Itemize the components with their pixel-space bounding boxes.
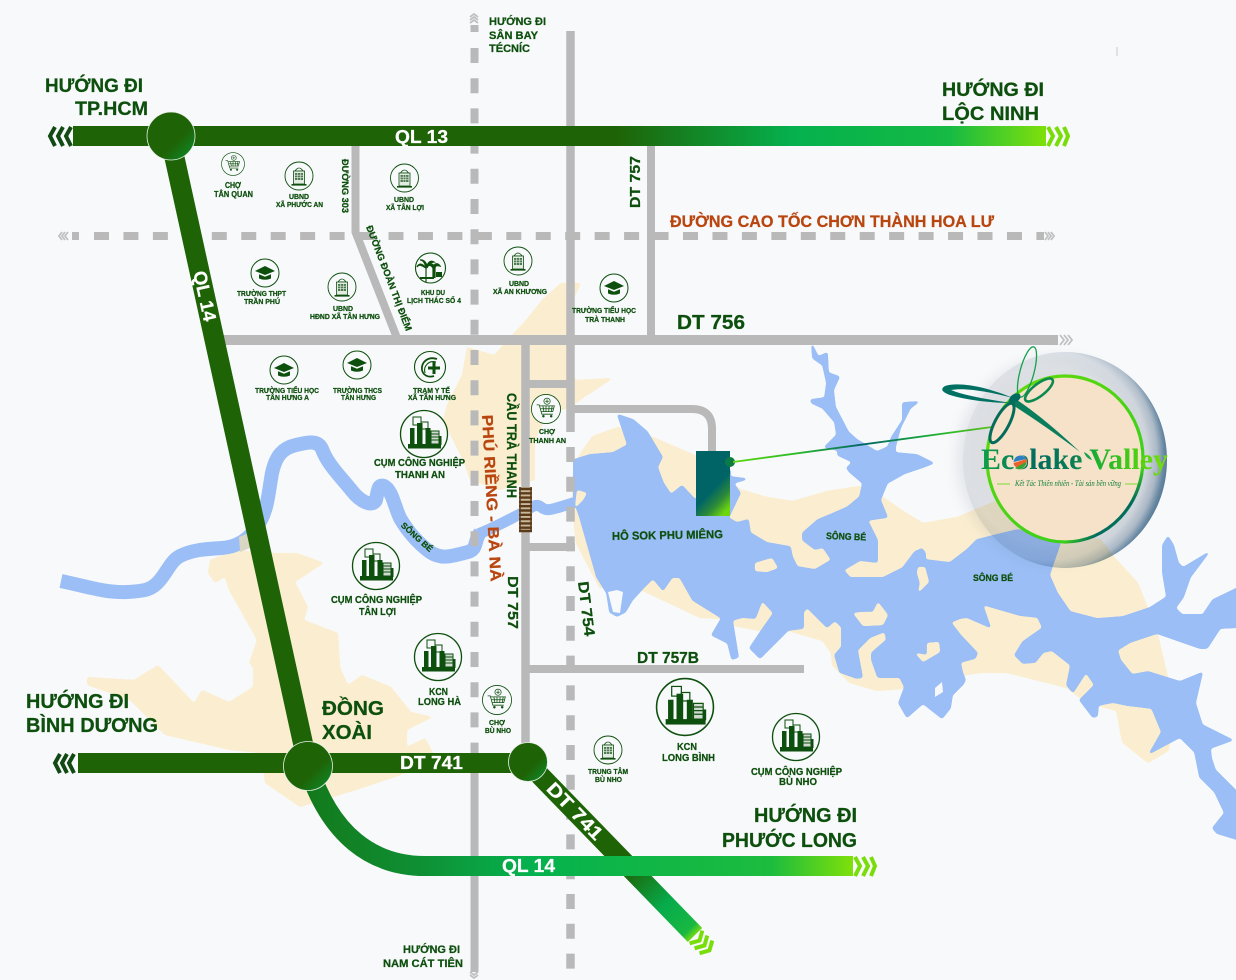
- direction Bình Dương: HƯỚNG ĐI: [26, 689, 129, 713]
- point of interest: UBND Xã Tân Lợi: XÃ TÂN LỢI: [386, 203, 424, 212]
- point of interest: Chợ Thanh An: CHỢ: [539, 427, 556, 436]
- label Phú Riềng - Bà Nà: PHÚ RIỀNG - BÀ NÀ: [478, 414, 505, 582]
- junction: DT741 east: [508, 742, 548, 782]
- point of interest: UBND Xã Phước An: XÃ PHƯỚC AN: [276, 200, 323, 209]
- point of interest: KCN Long Hà: LONG HÀ: [418, 695, 461, 708]
- point of interest: KCN Long Hà: KCN: [429, 687, 448, 698]
- direction Lộc Ninh: HƯỚNG ĐI: [942, 77, 1044, 101]
- label Sông Bé river: SÔNG BÉ: [399, 519, 436, 554]
- dragonfly emblem: [942, 345, 1080, 452]
- label QL 13: QL 13: [395, 126, 448, 147]
- point of interest: Chợ Tân Quan: TÂN QUAN: [214, 190, 253, 199]
- point of interest: Chợ Bù Nho: [482, 685, 512, 735]
- point of interest: KCN Long Bình: [657, 679, 715, 764]
- point of interest: Trạm Y tế Xã Tân Hưng: [408, 352, 456, 402]
- label expressway: ĐƯỜNG CAO TỐC CHƠN THÀNH HOA LƯ: [670, 211, 994, 231]
- label QL 14 vertical: QL 14: [189, 269, 221, 324]
- label Hô Sok Phu Miêng: HÔ SOK PHU MIÊNG: [612, 528, 723, 543]
- direction Nam Cát Tiên: [383, 943, 463, 970]
- point of interest: Chợ Thanh An: THANH AN: [529, 436, 566, 445]
- point of interest: Trạm Y tế Xã Tân Hưng: TRẠM Y TẾ: [413, 385, 450, 395]
- direction TP.HCM: TP.HCM: [75, 98, 148, 120]
- direction sân bay Técníc: HƯỚNG ĐI: [489, 15, 546, 28]
- point of interest: Chợ Bù Nho: BÙ NHO: [485, 726, 511, 735]
- label QL 14 bottom: QL 14: [502, 855, 556, 876]
- point of interest: Trường THCS Tân Hưng: TRƯỜNG THCS: [333, 386, 382, 395]
- point of interest: UBND Xã An Khương: [493, 247, 547, 296]
- point of interest: UBND Xã An Khương: UBND: [509, 279, 530, 288]
- point of interest: Chợ Tân Quan: [214, 153, 253, 199]
- point of interest: UBND Xã Tân Lợi: UBND: [394, 195, 415, 204]
- lake holes and river sand: [239, 533, 943, 697]
- label DT 757 top: DT 757: [627, 156, 644, 208]
- point of interest: Trường THPT Trần Phú: TRƯỜNG THPT: [237, 289, 286, 298]
- direction Bình Dương: [26, 689, 158, 737]
- direction TP.HCM: [45, 73, 148, 120]
- junction: QL13 and QL14: [147, 112, 195, 160]
- leader line to logo: [733, 427, 992, 462]
- point of interest: Chợ Tân Quan: CHỢ: [225, 181, 241, 190]
- direction Phước Long: PHƯỚC LONG: [722, 828, 857, 852]
- land sand areas: [87, 283, 1169, 807]
- lake islands: [575, 490, 940, 662]
- point of interest: Trường THCS Tân Hưng: TÂN HƯNG: [341, 393, 376, 402]
- point of interest: Cụm công nghiệp Tân Lợi: CỤM CÔNG NGHIỆP: [331, 593, 422, 606]
- point of interest: UBND Xã Phước An: [276, 162, 323, 209]
- Ecolake Valley logo badge: [942, 345, 1168, 568]
- point of interest: Trạm Y tế Xã Tân Hưng: XÃ TÂN HƯNG: [408, 393, 456, 402]
- point of interest: Cụm công nghiệp Tân Lợi: TÂN LỢI: [359, 605, 396, 618]
- point of interest: UBND HĐND Xã Tân Hưng: UBND: [333, 304, 354, 313]
- label DT 754: DT 754: [574, 580, 598, 638]
- direction Lộc Ninh: [942, 77, 1044, 125]
- point of interest: Cụm công nghiệp Bù Nho: BÙ NHO: [779, 775, 817, 788]
- direction sân bay Técníc: SÂN BAY: [489, 29, 539, 42]
- lake Sok Phu Miêng and Sông Bé reservoir: [574, 345, 1236, 840]
- logo tagline: Kết Tác Thiên nhiên - Tài sản bền vững: [1014, 479, 1121, 488]
- point of interest: Cụm công nghiệp Tân Lợi: [331, 542, 422, 618]
- point of interest: UBND Xã Phước An: UBND: [289, 192, 310, 201]
- point of interest: Cụm công nghiệp Bù Nho: [751, 714, 842, 788]
- label Sông Bé north: SÔNG BÉ: [826, 530, 866, 543]
- Đồng Xoài: ĐỒNG: [322, 696, 384, 720]
- point of interest: Trường Tiểu học Trà Thanh: TRÀ THANH: [585, 315, 625, 324]
- point of interest: Cụm công nghiệp Bù Nho: CỤM CÔNG NGHIỆP: [751, 765, 842, 778]
- point of interest: Khu du lịch Thác Số 4: KHU DU: [421, 288, 445, 297]
- junction: DT741 and QL14: [284, 742, 332, 790]
- direction Bình Dương: BÌNH DƯƠNG: [26, 714, 158, 737]
- point of interest: Chợ Bù Nho: CHỢ: [489, 718, 506, 727]
- road DT 741 diagonal: [528, 763, 716, 957]
- point of interest: Trường Tiểu học Tân Hưng A: TRƯỜNG TIỂU HỌC: [255, 386, 320, 395]
- road DT 741 horizontal: [55, 753, 528, 773]
- point of interest: Trường Tiểu học Tân Hưng A: TÂN HƯNG A: [266, 393, 310, 402]
- Đồng Xoài: [322, 696, 384, 744]
- label DT 741 horizontal: DT 741: [400, 752, 463, 773]
- direction sân bay Técníc: TÉCNÍC: [489, 42, 530, 55]
- point of interest: Trường Tiểu học Tân Hưng A: [255, 356, 320, 402]
- point of interest: Cụm công nghiệp Thanh An: CỤM CÔNG NGHIỆP: [374, 456, 465, 469]
- point of interest: KCN Long Bình: KCN: [677, 742, 697, 753]
- point of interest: Cụm công nghiệp Thanh An: [374, 410, 465, 481]
- tiny mark top right: [1116, 47, 1118, 56]
- road QL 13: [50, 126, 1068, 146]
- point of interest: Trường Tiểu học Trà Thanh: TRƯỜNG TIỂU HỌC: [572, 306, 637, 315]
- label đường Đoàn Thị Điểm: ĐƯỜNG ĐOÀN THỊ ĐIỂM: [363, 224, 415, 333]
- point of interest: UBND Xã Tân Lợi: [386, 164, 424, 212]
- direction Lộc Ninh: LỘC NINH: [942, 101, 1039, 125]
- label đường 303: ĐƯỜNG 303: [339, 159, 351, 213]
- label DT 757B: DT 757B: [637, 650, 699, 667]
- point of interest: Khu du lịch Thác Số 4: [407, 253, 462, 305]
- label DT 756: DT 756: [677, 312, 745, 334]
- logo leaf mark: [1084, 452, 1092, 460]
- logo wordmark: Ecolake Valley: [981, 443, 1168, 476]
- logo sun icon: [1013, 455, 1027, 469]
- point of interest: UBND HĐND Xã Tân Hưng: HĐND XÃ TÂN HƯNG: [310, 312, 380, 321]
- point of interest: Trường Tiểu học Trà Thanh: [572, 274, 637, 324]
- direction TP.HCM: HƯỚNG ĐI: [45, 73, 143, 97]
- point of interest: Chợ Thanh An: [529, 394, 566, 445]
- point of interest: Trung tâm Bù Nho: TRUNG TÂM: [588, 767, 628, 776]
- point of interest: Trường THCS Tân Hưng: [333, 351, 382, 402]
- label DT 757: DT 757: [504, 576, 521, 629]
- point of interest: UBND Xã An Khương: XÃ AN KHƯƠNG: [493, 287, 547, 296]
- direction Phước Long: [722, 803, 857, 852]
- direction sân bay Técníc: [489, 15, 546, 55]
- point of interest: Khu du lịch Thác Số 4: LỊCH THÁC SỐ 4: [407, 295, 462, 305]
- Đồng Xoài: XOÀI: [322, 721, 372, 744]
- project location marker: [696, 451, 735, 516]
- road QL 14: [170, 137, 875, 876]
- label cầu Trà Thanh: CẦU TRÀ THANH: [504, 393, 519, 498]
- direction Phước Long: HƯỚNG ĐI: [754, 803, 857, 827]
- point of interest: Trung tâm Bù Nho: [588, 736, 628, 784]
- point of interest: Trung tâm Bù Nho: BÙ NHO: [595, 775, 622, 784]
- point of interest: Trường THPT Trần Phú: [237, 259, 286, 306]
- label Sông Bé east: SÔNG BÉ: [973, 572, 1013, 584]
- point of interest: KCN Long Bình: LONG BÌNH: [662, 751, 715, 764]
- point of interest: KCN Long Hà: [414, 634, 462, 708]
- label DT 741 diagonal: DT 741: [542, 778, 608, 844]
- grey provincial roads: [72, 25, 1058, 972]
- bridge: [519, 487, 532, 532]
- direction Nam Cát Tiên: NAM CÁT TIÊN: [383, 957, 463, 970]
- river Sông Bé: [61, 442, 576, 592]
- road labels: [189, 126, 994, 876]
- water labels: [399, 519, 1013, 584]
- direction Nam Cát Tiên: HƯỚNG ĐI: [403, 943, 460, 956]
- point of interest: UBND HĐND Xã Tân Hưng: [310, 273, 380, 321]
- point of interest: Trường THPT Trần Phú: TRẦN PHÚ: [244, 296, 280, 306]
- point of interest: Cụm công nghiệp Thanh An: THANH AN: [395, 470, 445, 481]
